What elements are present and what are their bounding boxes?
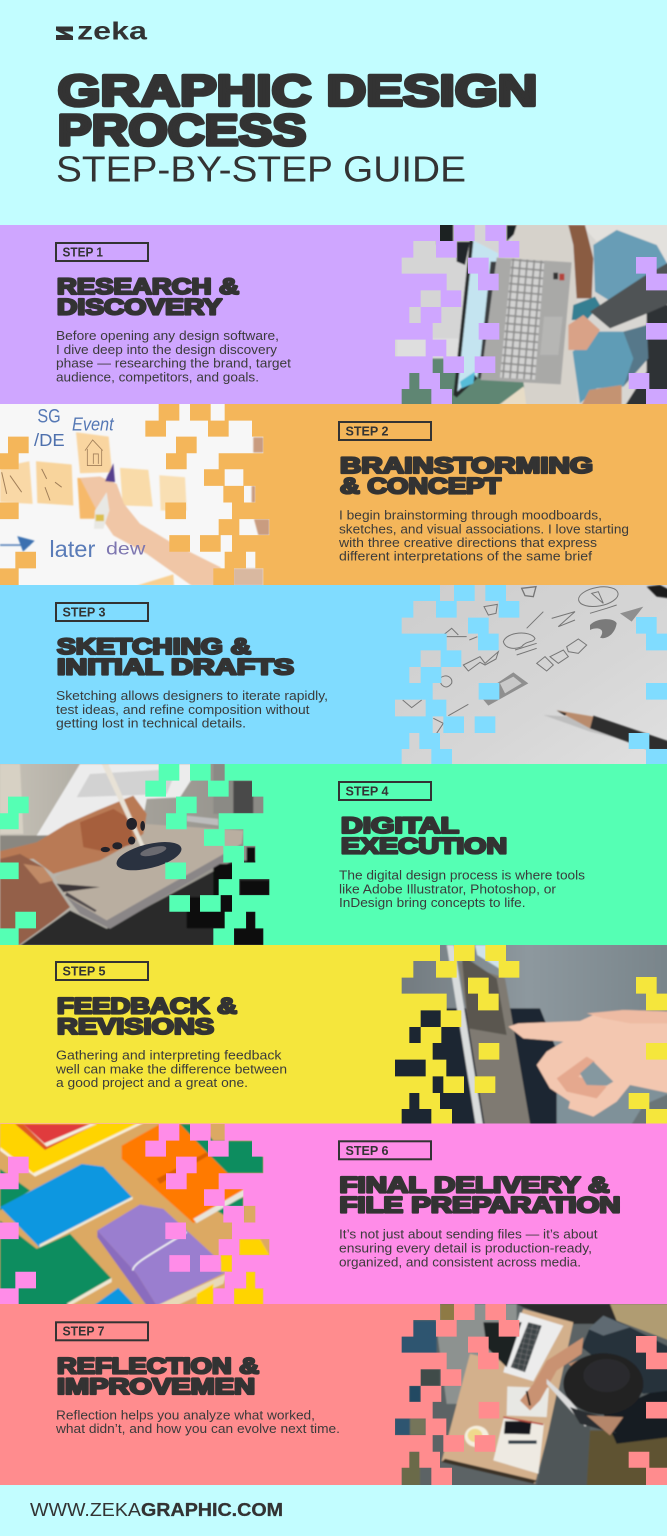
step 4 description xyxy=(339,867,586,910)
footer website url xyxy=(30,1500,283,1520)
step 2 description: different interpretations of the same brief xyxy=(339,549,592,564)
band background xyxy=(0,945,667,1124)
step 3 description: Sketching allows designers to iterate rapidly, xyxy=(56,688,328,703)
whiteboard handwriting: SG xyxy=(37,406,61,427)
step 7 badge xyxy=(56,1322,148,1340)
photo: hands drawing on a tablet xyxy=(0,764,270,945)
step 1 description: I dive deep into the design discovery xyxy=(56,342,278,357)
pixel mask xyxy=(0,764,277,946)
step 1 description: Before opening any design software, xyxy=(56,328,279,343)
step 6 description: organized, and consistent across media. xyxy=(339,1254,581,1269)
step 3 heading: SKETCHING & xyxy=(57,634,251,659)
step 6 heading: FILE PREPARATION xyxy=(340,1193,620,1218)
photo: laptop on a bed xyxy=(395,225,667,404)
step 4 heading xyxy=(341,813,507,859)
photo: finger pointing at a tablet xyxy=(395,945,667,1124)
step 1 description: phase — researching the brand, target xyxy=(56,356,291,371)
pixel mask xyxy=(390,225,667,407)
step 6 description xyxy=(339,1227,598,1269)
step 7 heading xyxy=(57,1353,259,1399)
band background xyxy=(0,1124,667,1304)
step 5 description: well can make the difference between xyxy=(55,1061,287,1076)
photo: logo sketches on paper with pencil xyxy=(395,585,667,764)
step 4 badge xyxy=(339,782,431,800)
step 3 description: getting lost in technical details. xyxy=(56,716,246,731)
pixel mask xyxy=(0,1124,277,1306)
step 5 badge xyxy=(56,962,148,980)
step 2 description xyxy=(338,507,629,564)
step 1 description: audience, competitors, and goals. xyxy=(56,370,259,385)
band background xyxy=(0,1304,667,1485)
step 7 heading: REFLECTION & xyxy=(57,1353,259,1378)
pixel mask xyxy=(390,945,667,1127)
step 2 badge: STEP 2 xyxy=(346,425,389,439)
step 2 description: sketches, and visual associations. I love starting xyxy=(339,521,629,536)
step 4 description: The digital design process is where tools xyxy=(339,867,586,882)
step 7 description xyxy=(55,1407,340,1436)
band background xyxy=(0,404,667,585)
panel: step 4 digital execution xyxy=(0,761,667,950)
step 1 badge xyxy=(56,243,148,261)
photo: colorful notebooks on wood xyxy=(0,1124,270,1304)
logo wordmark: zeka xyxy=(77,18,148,46)
whiteboard handwriting xyxy=(2,406,146,562)
band background xyxy=(0,225,667,405)
step 5 badge: STEP 5 xyxy=(62,964,106,978)
panel: step 1 research and discovery xyxy=(0,222,667,408)
header: logo and title xyxy=(56,18,537,190)
panel: step 6 final delivery and file preparation xyxy=(0,1121,667,1310)
pixel mask xyxy=(390,1304,667,1486)
step 2 description: with three creative directions that express xyxy=(338,535,598,550)
pixel mask xyxy=(390,585,667,767)
whiteboard handwriting: later xyxy=(49,536,96,562)
step 6 badge: STEP 6 xyxy=(346,1144,389,1158)
step 3 description: test ideas, and refine composition without xyxy=(56,702,310,717)
icon: zeka logo mark xyxy=(56,26,73,40)
title: PROCESS xyxy=(58,107,306,155)
photo: hand writing on whiteboard with sticky notes xyxy=(0,404,270,585)
step 1 description xyxy=(56,328,291,385)
photo: overhead view of person writing at a desk xyxy=(395,1304,667,1485)
title xyxy=(58,68,537,155)
panel: step 5 feedback and revisions xyxy=(0,942,667,1128)
step 7 description: what didn’t, and how you can evolve next time. xyxy=(55,1421,340,1436)
step 6 description: ensuring every detail is production-ready, xyxy=(339,1241,592,1256)
step 4 description: InDesign bring concepts to life. xyxy=(339,895,526,910)
step 4 badge: STEP 4 xyxy=(346,785,389,799)
step 3 description xyxy=(56,688,328,731)
whiteboard handwriting: /DE xyxy=(34,430,65,450)
step 5 description xyxy=(55,1047,287,1090)
step 6 heading: FINAL DELIVERY & xyxy=(340,1172,610,1197)
step 5 description: Gathering and interpreting feedback xyxy=(56,1047,282,1062)
drawing on tablet xyxy=(101,818,184,876)
step 4 description: like Adobe Illustrator, Photoshop, or xyxy=(339,881,557,896)
step 5 heading: REVISIONS xyxy=(57,1014,214,1039)
step 2 heading: BRAINSTORMING xyxy=(340,453,593,478)
band background xyxy=(0,764,667,945)
title: GRAPHIC DESIGN xyxy=(58,68,537,116)
step 7 description: Reflection helps you analyze what worked, xyxy=(56,1407,315,1422)
step 1 heading xyxy=(57,274,239,320)
panel: step 2 brainstorming and concept xyxy=(0,404,667,586)
step 2 badge xyxy=(339,422,431,440)
step 4 heading: DIGITAL xyxy=(341,813,459,838)
step 3 heading xyxy=(57,634,294,679)
step 1 badge: STEP 1 xyxy=(62,246,103,260)
step 2 description: I begin brainstorming through moodboards, xyxy=(339,507,602,522)
step 3 heading: INITIAL DRAFTS xyxy=(57,654,294,679)
band background xyxy=(0,585,667,764)
step 2 heading: & CONCEPT xyxy=(340,474,502,499)
step 7 heading: IMPROVEMEN xyxy=(57,1374,255,1399)
panel: step 3 sketching and initial drafts xyxy=(0,584,667,767)
whiteboard handwriting: dew xyxy=(106,538,146,558)
step 7 badge: STEP 7 xyxy=(62,1324,105,1338)
logo xyxy=(56,18,148,46)
step 5 heading: FEEDBACK & xyxy=(57,994,237,1019)
step 5 description: a good project and a great one. xyxy=(56,1075,248,1090)
step 6 description: It’s not just about sending files — it’s about xyxy=(339,1227,598,1242)
step 5 heading xyxy=(57,994,237,1039)
step 2 heading xyxy=(340,453,593,499)
step 1 heading: DISCOVERY xyxy=(57,294,223,320)
panel: step 7 reflection and improvement xyxy=(0,1301,667,1490)
step 6 badge xyxy=(339,1141,431,1159)
footer website url: GRAPHIC.COM xyxy=(141,1500,283,1520)
step 4 heading: EXECUTION xyxy=(341,834,507,859)
pixel mask xyxy=(0,404,277,586)
step 3 badge: STEP 3 xyxy=(62,606,106,620)
footer website url: WWW.ZEKA xyxy=(30,1500,141,1520)
step 6 heading xyxy=(340,1172,620,1218)
whiteboard handwriting: Event xyxy=(72,414,114,435)
step 1 heading: RESEARCH & xyxy=(57,274,239,299)
subtitle: STEP-BY-STEP GUIDE xyxy=(56,149,466,190)
step 3 badge xyxy=(56,603,148,621)
